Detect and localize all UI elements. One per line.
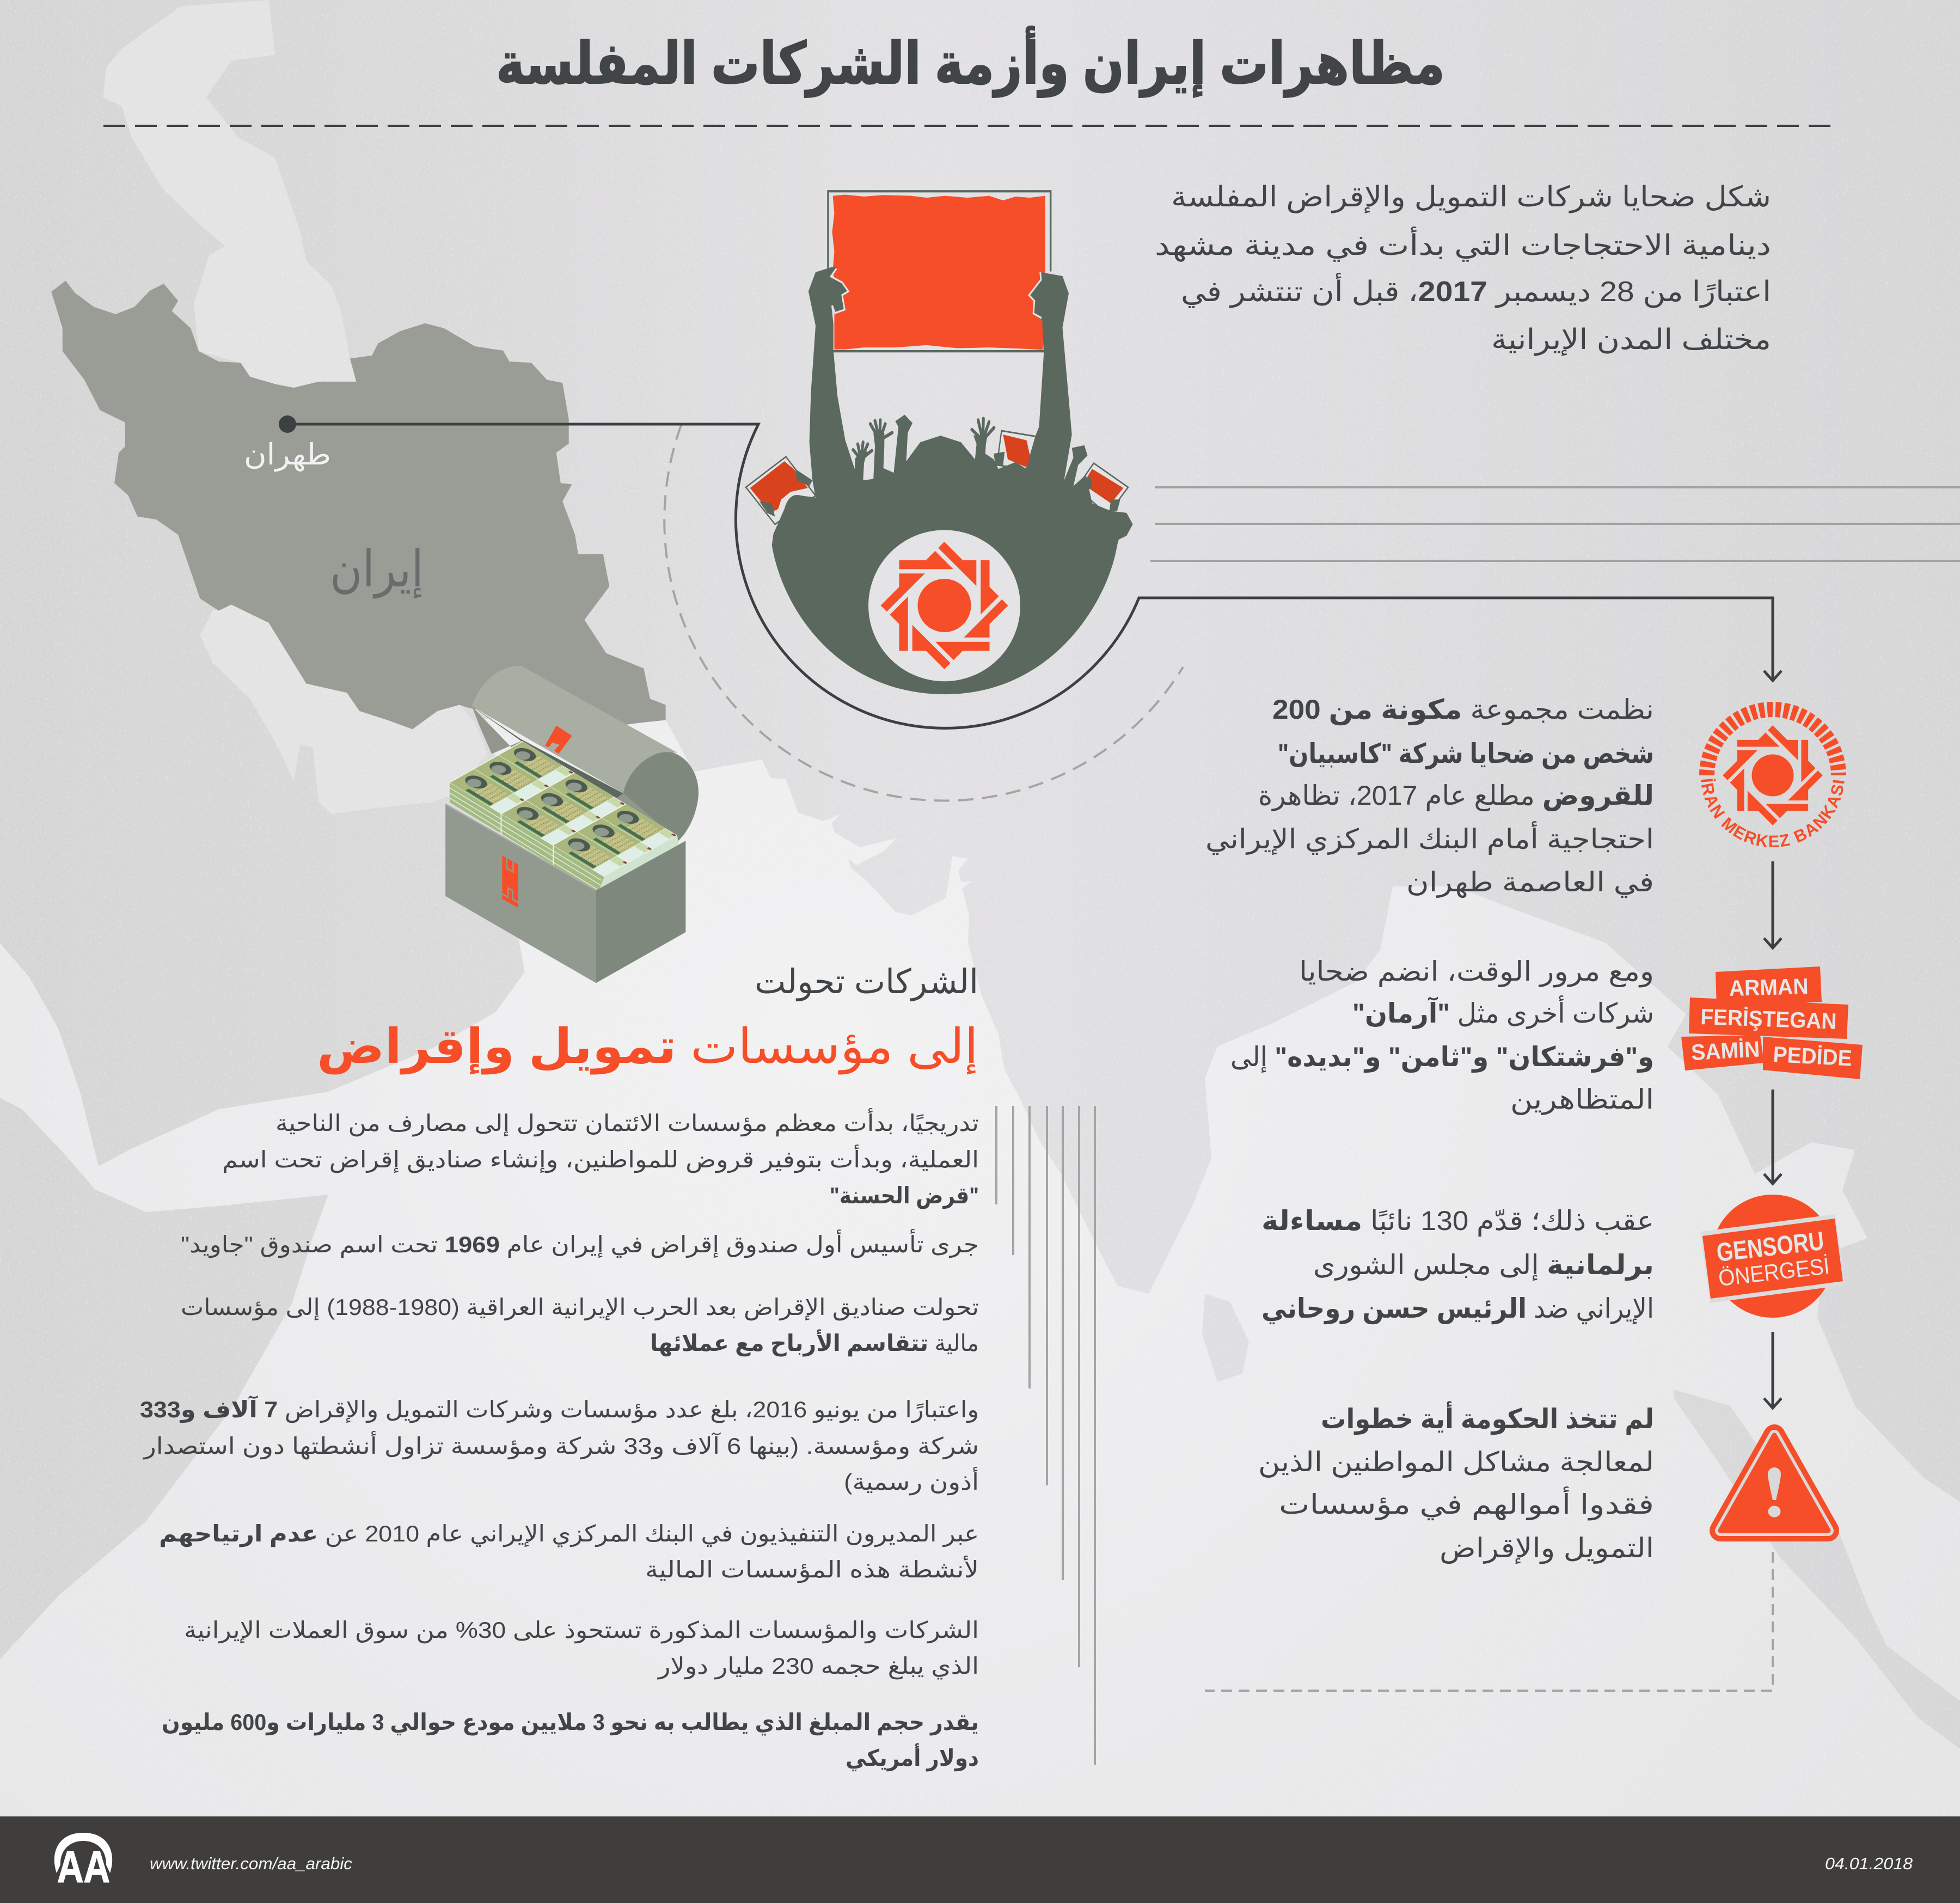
chest interior (472, 706, 678, 856)
left column text: لأنشطة هذه المؤسسات المالية (645, 1555, 979, 1583)
left column text: تدريجيًا، بدأت معظم مؤسسات الائتمان تتحول إلى مصارف من الناحية (275, 1108, 979, 1137)
left column text: أذون رسمية) (844, 1467, 979, 1495)
company name tags: ARMAN (1729, 974, 1809, 1001)
raised fingers (853, 419, 994, 460)
silhouette of crowd (772, 267, 1133, 694)
left column text: العملية، وبدأت بتوفير قروض للمواطنين، وإنشاء صناديق إقراض تحت اسم (222, 1145, 979, 1173)
left column text: شركة ومؤسسة. (بينها 6 آلاف و33 شركة ومؤسسة تزاول أنشطتها دون استصدار (143, 1431, 979, 1460)
right text block 3: برلمانية إلى مجلس الشورى (1313, 1250, 1654, 1281)
connector from Tehran through the emblem to first arrow (279, 415, 1781, 728)
left column text: مالية تتقاسم الأرباح مع عملائها (650, 1329, 979, 1357)
left column text: "قرض الحسنة" (830, 1183, 979, 1209)
right text block 2: ومع مرور الوقت، انضم ضحايا (1299, 956, 1654, 988)
intro text block: اعتبارًا من 28 ديسمبر 2017، قبل أن تنتشر في (1181, 273, 1771, 308)
hand outlines on placard (831, 268, 1042, 318)
icon: AA logo: AA (57, 1843, 110, 1892)
lid (472, 666, 677, 793)
left column text (140, 1108, 979, 1772)
heading: companies became: الشركات تحولت (755, 963, 978, 1001)
right text block 3: عقب ذلك؛ قدّم 130 نائبًا مساءلة (1261, 1206, 1654, 1237)
seal ticks (1707, 709, 1839, 775)
icon: AA logo (54, 1833, 112, 1892)
right text block 1: احتجاجية أمام البنك المركزي الإيراني (1205, 821, 1654, 855)
icon: small placards (746, 431, 1128, 524)
intro text block (1155, 181, 1771, 356)
right text block 2: و"فرشتكان" و"ثامن" و"بديده" إلى (1230, 1042, 1654, 1073)
left column text: واعتبارًا من يونيو 2016، بلغ عدد مؤسسات وشركات التمويل والإقراض 7 آلاف و333 (140, 1396, 979, 1423)
map of Iran (51, 281, 666, 729)
left column text: تحولت صناديق الإقراض بعد الحرب الإيرانية العراقية (1980-1988) إلى مؤسسات (181, 1294, 979, 1321)
right text block 4: لم تتخذ الحكومة أية خطوات (1321, 1401, 1654, 1435)
chest front face (445, 804, 596, 983)
icon: interpellation motion badge (1700, 1195, 1845, 1318)
company name tags (1681, 966, 1863, 1079)
right text block 1: نظمت مجموعة مكونة من 200 (1272, 694, 1654, 726)
chest side face (596, 841, 685, 983)
emblem circle (868, 530, 1020, 681)
seal text: İRAN MERKEZ BANKASI (1701, 779, 1845, 847)
right text block 4: التمويل والإقراض (1440, 1533, 1654, 1564)
intro text block: دينامية الاحتجاجات التي بدأت في مدينة مشهد (1155, 227, 1771, 262)
dashed arc around protest emblem (664, 425, 1183, 800)
intro text block: مختلف المدن الإيرانية (1491, 324, 1771, 356)
label: Iran: إيران (330, 542, 424, 599)
money chest (445, 666, 699, 983)
right text block 1 (1205, 694, 1654, 898)
decorative horizontal lines (1150, 487, 1960, 561)
right text block 1: في العاصمة طهران (1406, 867, 1654, 898)
left column text: الشركات والمؤسسات المذكورة تستحوذ على 30% من سوق العملات الإيرانية (184, 1617, 979, 1643)
arrow 4 (1764, 1332, 1781, 1408)
left column text: الذي يبلغ حجمه 230 مليار دولار (657, 1653, 979, 1680)
date: 04.01.2018 (1825, 1854, 1913, 1873)
right text block 1: للقروض مطلع عام 2017، تظاهرة (1258, 780, 1654, 812)
title divider (103, 125, 1837, 127)
left column text: عبر المديرون التنفيذيون في البنك المركزي الإيراني عام 2010 عن عدم ارتياحهم (159, 1521, 979, 1547)
right text block 3 (1261, 1206, 1654, 1325)
icon: central bank seal (1699, 702, 1846, 847)
twitter handle: www.twitter.com/aa_arabic (150, 1854, 352, 1873)
left column text: يقدر حجم المبلغ الذي يطالب به نحو 3 ملايين مودع حوالي 3 مليارات و600 مليون (162, 1709, 979, 1736)
icon: interpellation motion badge: ÖNERGESİ (1717, 1253, 1831, 1291)
protest emblem (746, 191, 1133, 694)
stack of banknotes (450, 741, 678, 891)
lid side (623, 752, 699, 841)
right text block 1: شخص من ضحايا شركة "كاسبيان" (1278, 738, 1654, 770)
icon: interpellation motion badge: GENSORU (1715, 1227, 1826, 1268)
icon: central bank logo in emblem (881, 542, 1008, 669)
label: Tehran: طهران (244, 438, 331, 472)
intro text block: شكل ضحايا شركات التمويل والإقراض المفلسة (1171, 181, 1771, 213)
chest rim (445, 804, 596, 890)
icon: placard (828, 191, 1051, 351)
footer bar (0, 1816, 1960, 1903)
left column text: جرى تأسيس أول صندوق إقراض في إيران عام 1969 تحت اسم صندوق "جاويد" (181, 1228, 979, 1258)
title: مظاهرات إيران وأزمة الشركات المفلسة (496, 26, 1445, 98)
right text block 4 (1258, 1401, 1654, 1564)
dashed connector (1205, 1552, 1773, 1691)
left column text: دولار أمريكي (846, 1743, 979, 1772)
arrow 2 (1764, 861, 1781, 948)
right text block 2 (1230, 956, 1654, 1115)
icon: warning triangle (1720, 1435, 1828, 1531)
right text block 2: شركات أخرى مثل "آرمان" (1352, 995, 1654, 1029)
company name tags: FERİŞTEGAN (1700, 1004, 1837, 1034)
lid emblem (545, 726, 572, 754)
right text block 3: الإيراني ضد الرئيس حسن روحاني (1261, 1293, 1654, 1325)
heading: finance and loan institutions: إلى مؤسسات تمويل وإقراض (317, 1019, 978, 1075)
right text block 4: لمعالجة مشاكل المواطنين الذين (1258, 1447, 1654, 1478)
company name tags: PEDİDE (1773, 1042, 1853, 1071)
right text block 4: فقدوا أموالهم في مؤسسات (1279, 1486, 1654, 1521)
chest front emblem (502, 855, 518, 908)
right text block 2: المتظاهرين (1510, 1084, 1654, 1115)
arrow 3 (1764, 1090, 1781, 1184)
company name tags: SAMİN (1690, 1036, 1760, 1065)
vertical decorative lines (996, 1106, 1095, 1765)
